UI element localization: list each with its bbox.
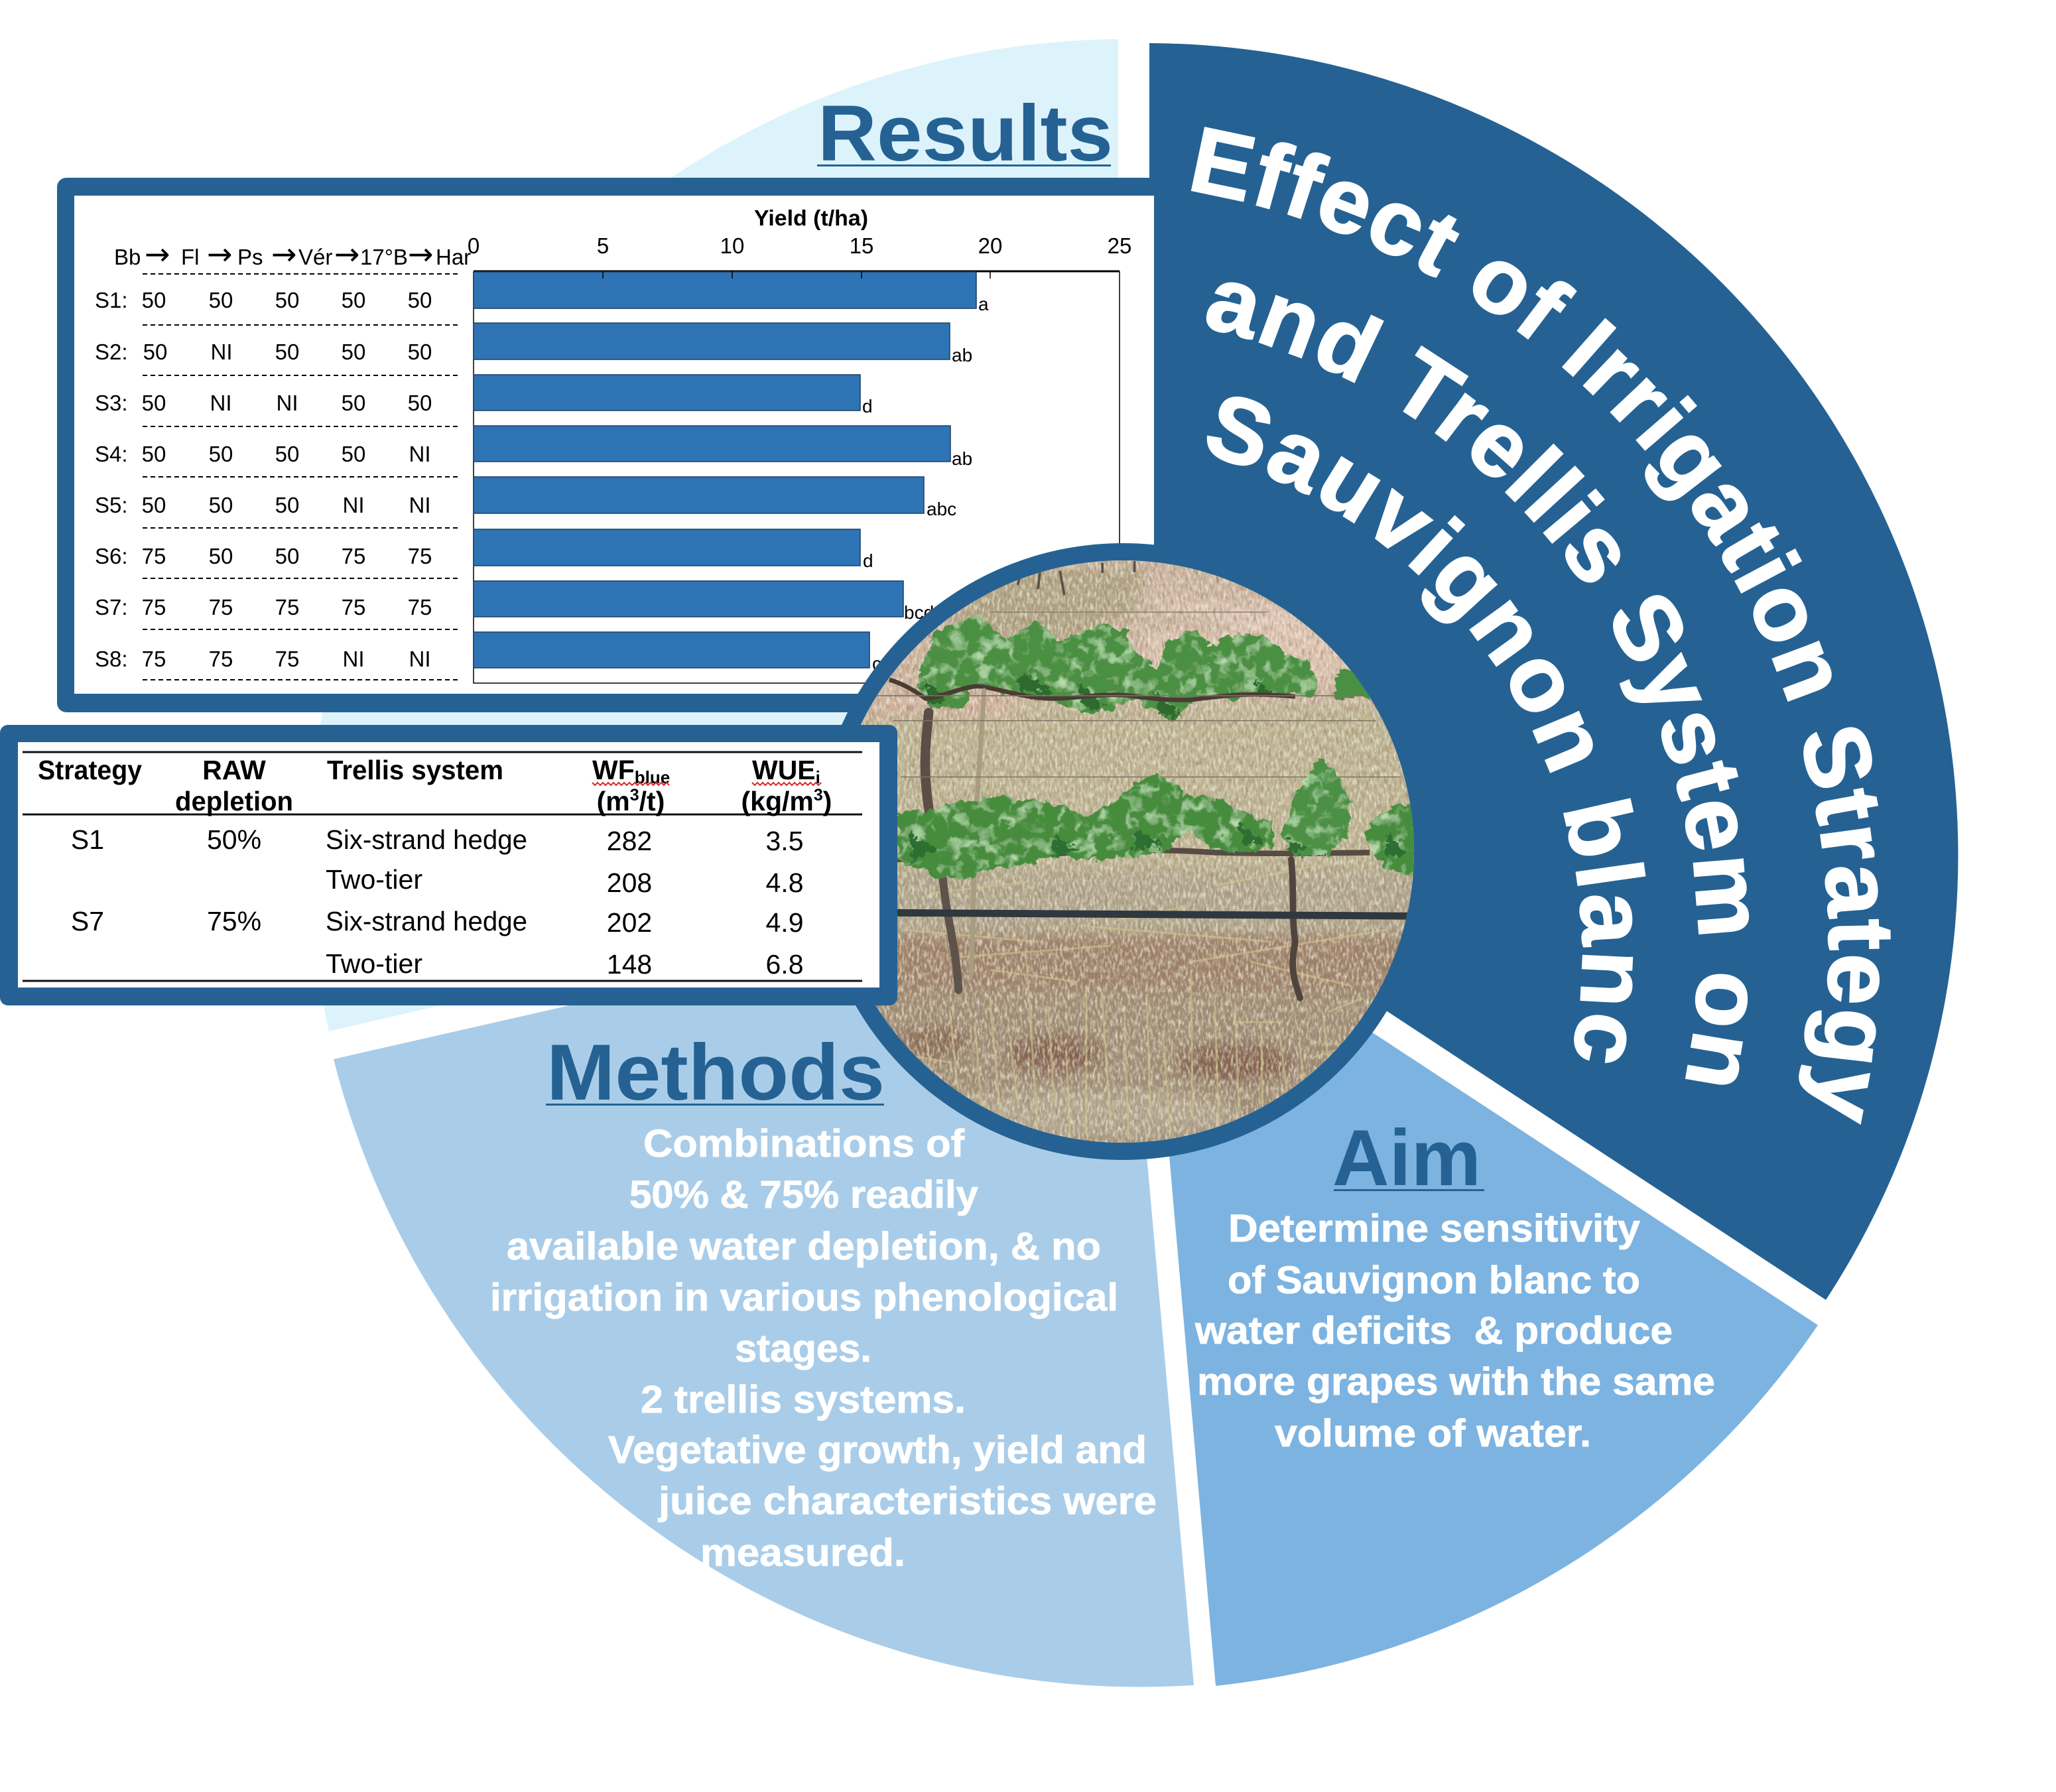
significance letters: d: [862, 396, 873, 416]
table body: Six-strand hedge: [326, 906, 527, 936]
irrigation strategy rows: NI: [342, 493, 365, 517]
heading: Results: Results: [818, 89, 1113, 178]
chart axis tick labels: 0: [468, 233, 480, 258]
irrigation strategy rows: NI: [210, 391, 232, 415]
table body: 4.9: [765, 907, 804, 938]
text block: aim description: water deficits & produce: [1194, 1309, 1673, 1352]
significance letters: ab: [952, 448, 972, 469]
irrigation strategy rows: 50: [275, 288, 299, 312]
irrigation strategy rows: 75: [408, 595, 432, 619]
table body: 208: [607, 867, 652, 898]
phenological stage header: →: [145, 236, 170, 272]
table header: depletion: [175, 786, 293, 816]
irrigation strategy rows: 50: [408, 340, 432, 364]
irrigation strategy rows: S3:: [95, 391, 128, 415]
irrigation strategy rows: 75: [209, 647, 233, 671]
irrigation strategy rows: 50: [275, 340, 299, 364]
irrigation strategy rows: 75: [142, 544, 166, 568]
irrigation strategy rows: 50: [275, 493, 299, 517]
text block: methods description: 50% & 75% readily: [629, 1173, 978, 1216]
irrigation strategy rows: 50: [142, 442, 166, 466]
irrigation strategy rows: 75: [142, 595, 166, 619]
title line 3 path: [1200, 452, 1582, 1130]
text block: methods description: [490, 1122, 1157, 1574]
irrigation strategy rows: 50: [342, 340, 365, 364]
dashed row separators: [143, 274, 458, 680]
icon: circular ring around vineyard photo: [814, 543, 1431, 1160]
table header: [38, 755, 832, 816]
significance letters: [862, 294, 989, 674]
irrigation strategy rows: S7:: [95, 595, 128, 619]
phenological stage header: Fl: [181, 245, 199, 269]
irrigation strategy rows: NI: [409, 647, 431, 671]
chart axis tick labels: 10: [720, 233, 744, 258]
significance letters: cd: [872, 653, 892, 674]
chart axis tick labels: 20: [978, 233, 1002, 258]
irrigation strategy rows: 50: [209, 442, 233, 466]
significance letters: a: [978, 294, 989, 314]
phenological stage header: Vér: [298, 245, 332, 269]
irrigation strategy rows: 75: [342, 544, 365, 568]
table header: RAW: [202, 755, 266, 785]
phenological stage header: 17°B: [360, 245, 408, 269]
table body: 148: [607, 949, 652, 980]
phenological stage header: →: [408, 236, 434, 272]
photo lower canopy: [897, 757, 1416, 877]
table header: 3: [630, 786, 639, 804]
panel: yield chart: [57, 178, 1171, 712]
spellcheck squiggles: [592, 783, 821, 785]
text block: methods description: measured.: [700, 1531, 905, 1574]
table body: 50%: [207, 824, 261, 855]
panel: methods sector background: [334, 879, 1194, 1687]
title line 2: and Trellis System on: [1206, 283, 1750, 1085]
chart axis tick labels: 5: [597, 233, 609, 258]
text block: methods description: available water depletion, & no: [507, 1225, 1101, 1268]
phenological stage header: →: [207, 236, 233, 272]
irrigation strategy rows: 75: [342, 595, 365, 619]
axis ticks: [603, 271, 990, 279]
title line 2 path: [1202, 326, 1699, 1169]
table header: Trellis system: [327, 755, 503, 785]
chart frame: [57, 178, 1171, 712]
table header: i: [816, 767, 820, 787]
text block: methods description: juice characteristics were: [658, 1480, 1157, 1523]
chart axis tick labels: 15: [850, 233, 873, 258]
chart white background: [74, 196, 1154, 694]
irrigation strategy rows: 50: [142, 391, 166, 415]
phenological stage header: Bb: [114, 245, 141, 269]
irrigation strategy rows: 50: [408, 391, 432, 415]
table body: S7: [71, 906, 104, 936]
phenological stage header: →: [334, 236, 360, 272]
significance letters: abc: [927, 499, 956, 519]
table body: 6.8: [765, 949, 804, 980]
table header: (kg/m: [741, 786, 814, 816]
significance letters: bcd: [904, 602, 934, 623]
phenological stage header: Ps: [237, 245, 263, 269]
chart axis tick labels: [468, 233, 1131, 258]
irrigation strategy rows: 50: [275, 544, 299, 568]
table body: S1: [71, 824, 104, 855]
text block: methods description: stages.: [735, 1327, 871, 1370]
text block: methods description: irrigation in various phenological: [490, 1276, 1118, 1319]
horizontal yield bars: [474, 272, 976, 668]
irrigation strategy rows: 75: [275, 595, 299, 619]
irrigation strategy rows: 50: [209, 544, 233, 568]
plot frame: [474, 271, 1120, 683]
photo drip pipe: [895, 913, 1408, 916]
heading: Aim: Aim: [1332, 1114, 1481, 1202]
table header: ): [823, 786, 832, 816]
photo upper canopy: [917, 617, 1370, 721]
table header: 3: [814, 786, 823, 804]
irrigation strategy rows: [95, 288, 432, 671]
photo: vineyard trellis: [861, 560, 1414, 1143]
text block: aim description: of Sauvignon blanc to: [1228, 1259, 1640, 1302]
text block: aim description: Determine sensitivity: [1228, 1207, 1640, 1250]
table header: blue: [635, 767, 670, 787]
irrigation strategy rows: NI: [211, 340, 232, 364]
irrigation strategy rows: NI: [409, 442, 431, 466]
text block: methods description: Combinations of: [643, 1122, 965, 1165]
irrigation strategy rows: S5:: [95, 493, 128, 517]
table header: WUE: [752, 755, 816, 785]
irrigation strategy rows: 75: [408, 544, 432, 568]
table body: 202: [607, 907, 652, 938]
irrigation strategy rows: S6:: [95, 544, 128, 568]
text block: aim description: volume of water.: [1275, 1412, 1591, 1455]
table frame: [0, 725, 897, 1005]
text block: methods description: Vegetative growth, yield and: [608, 1429, 1147, 1472]
irrigation strategy rows: 50: [209, 288, 233, 312]
significance letters: ab: [952, 345, 972, 365]
table body: Six-strand hedge: [326, 824, 527, 855]
table white background: [18, 742, 879, 988]
photo straw strokes: [901, 865, 1387, 1139]
phenological stage header: →: [271, 236, 297, 272]
table header: Strategy: [38, 755, 142, 785]
irrigation strategy rows: 50: [209, 493, 233, 517]
irrigation strategy rows: 50: [142, 288, 166, 312]
title: curved text: [1155, 127, 1891, 1125]
panel: title sector background: [1149, 43, 1958, 1300]
irrigation strategy rows: 50: [142, 493, 166, 517]
heading: Methods: Methods: [546, 1028, 885, 1117]
irrigation strategy rows: 50: [342, 288, 365, 312]
panel: aim sector background: [1145, 883, 1818, 1686]
significance letters: d: [863, 550, 873, 571]
text block: aim description: [1194, 1207, 1715, 1455]
chart axis title: Yield (t/ha): [754, 206, 868, 230]
table header: (m: [597, 786, 630, 816]
irrigation strategy rows: 50: [342, 391, 365, 415]
phenological stage header: Har: [436, 245, 471, 269]
title line 3: Sauvignon blanc: [1207, 397, 1646, 1063]
table body: 282: [607, 826, 652, 856]
panel: water footprint table: [0, 725, 897, 1005]
irrigation strategy rows: NI: [342, 647, 365, 671]
irrigation strategy rows: 50: [408, 288, 432, 312]
irrigation strategy rows: S1:: [95, 288, 128, 312]
table body: 3.5: [765, 826, 804, 856]
irrigation strategy rows: S4:: [95, 442, 128, 466]
table rules: [23, 752, 862, 981]
table body: Two-tier: [326, 864, 422, 895]
irrigation strategy rows: S8:: [95, 647, 128, 671]
irrigation strategy rows: 50: [143, 340, 167, 364]
text block: aim description: more grapes with the same: [1197, 1360, 1715, 1403]
irrigation strategy rows: 75: [142, 647, 166, 671]
irrigation strategy rows: 50: [342, 442, 365, 466]
table body: 75%: [207, 906, 261, 936]
irrigation strategy rows: 75: [209, 595, 233, 619]
panel: results sector background: [310, 39, 1118, 1031]
chart axis tick labels: 25: [1108, 233, 1131, 258]
table body: [71, 824, 804, 980]
table header: /t): [639, 786, 665, 816]
photo texture: [865, 560, 1413, 1143]
irrigation strategy rows: S2:: [95, 340, 128, 364]
table header: WF: [592, 755, 635, 785]
irrigation strategy rows: NI: [409, 493, 431, 517]
irrigation strategy rows: 75: [275, 647, 299, 671]
photo trunks and posts: [877, 562, 1400, 998]
irrigation strategy rows: 50: [275, 442, 299, 466]
photo lower cordon: [897, 850, 1370, 860]
text block: methods description: 2 trellis systems.: [641, 1378, 966, 1421]
table body: 4.8: [765, 867, 804, 898]
photo upper cordon: [889, 680, 1295, 700]
table body: Two-tier: [326, 948, 422, 979]
irrigation strategy rows: NI: [276, 391, 298, 415]
title line 1: Effect of Irrigation Strategy: [1191, 127, 1891, 1125]
title line 1 path: [1186, 190, 1829, 1214]
